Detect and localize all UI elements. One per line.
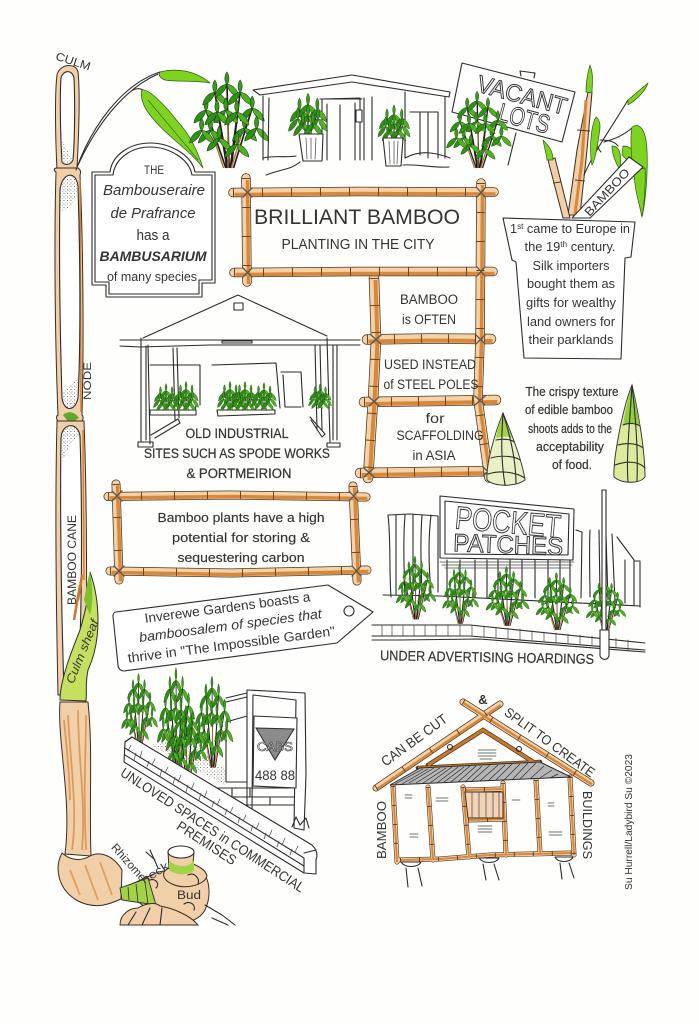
sign text bbox=[100, 165, 207, 284]
bamboo plant tag: BAMBOO bbox=[581, 166, 633, 219]
industrial caption: OLD INDUSTRIAL bbox=[186, 426, 289, 441]
hoarding plants bbox=[396, 556, 626, 632]
node label: NODE bbox=[82, 362, 94, 400]
pot text: th bbox=[560, 240, 567, 249]
lamp post bbox=[600, 490, 609, 659]
culm top segment bbox=[56, 66, 79, 170]
rafters bbox=[418, 730, 540, 768]
ladder text bbox=[384, 292, 484, 463]
buildings side label: BUILDINGS bbox=[580, 791, 595, 859]
gravel bed bbox=[150, 738, 225, 785]
vacant lots sign bbox=[446, 63, 575, 168]
hut small marks bbox=[405, 750, 562, 837]
industrial caption bbox=[144, 426, 330, 481]
ladder text: BAMBOO bbox=[400, 292, 458, 307]
ladder text: of STEEL POLES bbox=[384, 377, 478, 392]
tag text bbox=[127, 589, 336, 666]
cabs sign: 488 88 bbox=[255, 767, 295, 783]
ladder text: USED INSTEAD bbox=[384, 357, 476, 372]
edible text: shoots adds to the bbox=[528, 422, 612, 436]
edible text: of food. bbox=[552, 458, 592, 472]
neck label: neck bbox=[140, 860, 172, 886]
cabs sign: CABS bbox=[257, 739, 293, 754]
vacant lots sign: LOTS bbox=[495, 97, 553, 140]
bamboo leaves bbox=[584, 83, 648, 217]
pot text bbox=[510, 222, 630, 347]
tag text: Inverewe Gardens boasts a bbox=[144, 589, 312, 626]
pot text: bought them as bbox=[527, 277, 615, 291]
sign: bambouseraire bbox=[92, 143, 215, 297]
rhizome bbox=[58, 846, 235, 925]
inverewe tag bbox=[113, 585, 373, 671]
low brick wall right bbox=[210, 788, 294, 805]
flower pot with bamboo bbox=[503, 65, 648, 359]
carbon frame bbox=[108, 484, 368, 582]
pot text: the 19 bbox=[524, 240, 559, 254]
bamboo house bbox=[376, 702, 592, 887]
culm sheaf: Culm sheaf bbox=[63, 616, 102, 686]
pocket patches sign: PATCHES bbox=[453, 529, 564, 561]
sign text: THE bbox=[144, 165, 164, 177]
pot text: 1 bbox=[510, 222, 517, 236]
kerb bbox=[372, 625, 645, 652]
carbon text: Bamboo plants have a high bbox=[158, 510, 324, 525]
split to create label: SPLIT TO CREATE bbox=[502, 705, 598, 780]
window plants bbox=[153, 381, 332, 411]
thatch bbox=[390, 762, 571, 785]
sign text: de Prafrance bbox=[110, 205, 196, 222]
old industrial building bbox=[120, 295, 360, 447]
carbon text bbox=[158, 510, 324, 565]
title: BRILLIANT BAMBOO bbox=[254, 206, 460, 229]
edible text: of edible bamboo bbox=[525, 403, 613, 417]
tag text: thrive in "The Impossible Garden" bbox=[127, 623, 336, 666]
sign text: BAMBUSARIUM bbox=[100, 248, 207, 264]
pocket patches scene bbox=[372, 490, 645, 659]
title bbox=[254, 206, 460, 253]
and label: & bbox=[478, 692, 488, 707]
commercial caption: UNLOVED SPACES in COMMERCIAL bbox=[118, 764, 308, 895]
tag text: bamboosalem of species that bbox=[138, 606, 324, 645]
stilts bbox=[401, 857, 574, 887]
culm label: CULM bbox=[54, 51, 92, 73]
bud label: Bud bbox=[177, 890, 201, 902]
sign text: Bambouseraire bbox=[103, 182, 205, 199]
shoot right bbox=[614, 385, 645, 482]
cane base bbox=[60, 702, 91, 856]
pocket patches sign bbox=[440, 496, 574, 561]
pot text: land owners for bbox=[527, 315, 615, 329]
ladder text: is OFTEN bbox=[402, 312, 456, 327]
pot text: came to Europe in bbox=[523, 222, 630, 236]
title frame and ladder frame bbox=[233, 178, 500, 480]
edible text bbox=[525, 385, 619, 472]
artist credit: Su Hurrell/Ladybird Su ©2023 bbox=[623, 754, 635, 890]
suburban building bbox=[253, 75, 450, 175]
cane lower segment bbox=[56, 421, 87, 695]
potted plant left bbox=[288, 93, 328, 161]
pot text: century. bbox=[567, 240, 616, 254]
roof poles bbox=[376, 702, 592, 789]
sign text: has a bbox=[136, 228, 170, 244]
ladder text: SCAFFOLDING bbox=[396, 428, 484, 443]
pocket patches sign: POCKET bbox=[454, 499, 562, 545]
cabs sign bbox=[247, 690, 306, 830]
plants bbox=[122, 668, 233, 782]
bamboo cane label: BAMBOO CANE bbox=[67, 515, 79, 605]
culm sheaf bbox=[60, 572, 102, 701]
rhizome label: Rhizome bbox=[108, 842, 148, 884]
plants in front of sign bbox=[446, 91, 511, 168]
pot text: their parklands bbox=[528, 333, 614, 347]
pot text: st bbox=[517, 222, 524, 231]
commercial caption: PREMISES bbox=[174, 818, 240, 868]
bamboo side label: BAMBOO bbox=[374, 801, 389, 859]
ladder text: for bbox=[426, 411, 445, 426]
edible text: acceptability bbox=[536, 440, 605, 454]
industrial caption: & PORTMEIRION bbox=[186, 466, 292, 481]
shoot left bbox=[487, 413, 525, 485]
fence bbox=[383, 514, 640, 607]
can be cut label: CAN BE CUT bbox=[378, 710, 451, 769]
branch with leaves bbox=[76, 70, 210, 170]
plant cluster by building bbox=[190, 72, 269, 168]
potted plant right bbox=[378, 105, 410, 166]
pot text: Silk importers bbox=[532, 259, 610, 273]
commercial premises scene bbox=[122, 668, 317, 874]
hoardings caption: UNDER ADVERTISING HOARDINGS bbox=[380, 647, 594, 667]
carbon text: potential for storing & bbox=[172, 530, 310, 545]
cane middle segment with node bbox=[54, 168, 83, 424]
edible text: The crispy texture bbox=[526, 385, 619, 399]
vacant lots sign: VACANT bbox=[474, 71, 570, 121]
carbon text: sequestering carbon bbox=[178, 550, 304, 565]
sign text: of many species bbox=[107, 269, 197, 284]
pot text: gifts for wealthy bbox=[526, 296, 617, 310]
brick wall bbox=[124, 737, 317, 874]
bamboo shoots and edible text bbox=[487, 385, 645, 485]
title: PLANTING IN THE CITY bbox=[282, 236, 434, 253]
ladder text: in ASIA bbox=[412, 448, 456, 463]
office building bbox=[226, 693, 250, 782]
bamboo shoots bbox=[543, 65, 592, 218]
bamboo cane diagram bbox=[54, 51, 235, 925]
walls bbox=[393, 777, 574, 862]
industrial caption: SITES SUCH AS SPODE WORKS bbox=[144, 446, 330, 461]
bamboo plant tag bbox=[572, 157, 643, 219]
